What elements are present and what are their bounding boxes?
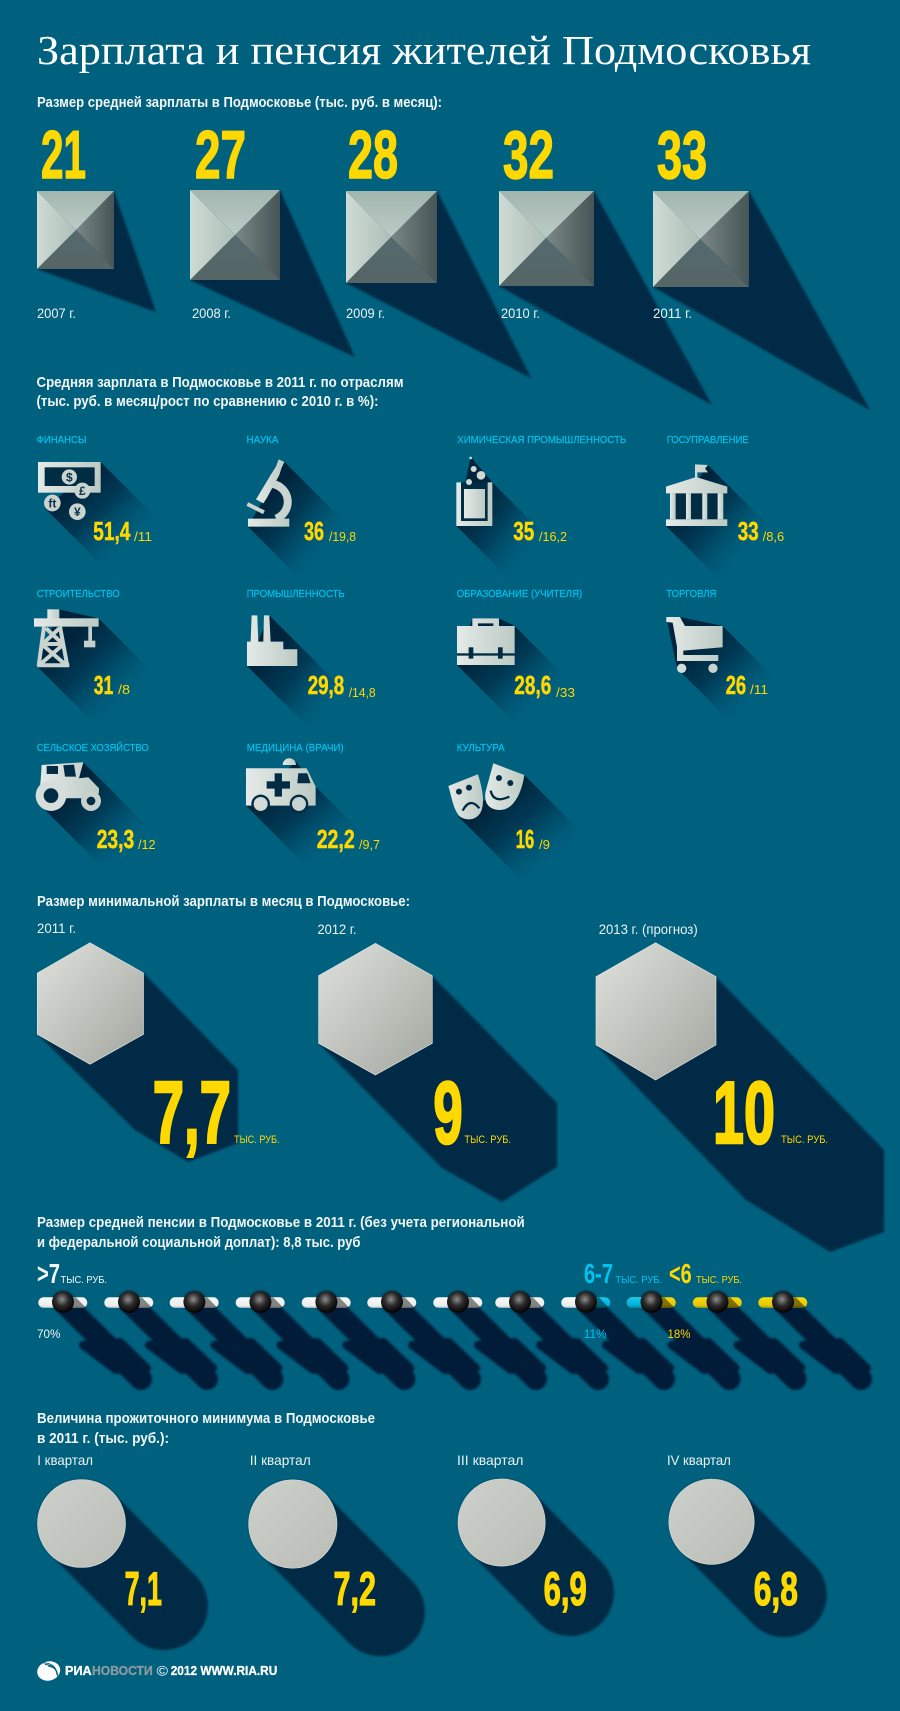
- circles: [38, 1479, 754, 1568]
- value: 35: [513, 518, 534, 546]
- value: /8,6: [763, 530, 784, 544]
- wordmark: НОВОСТИ: [92, 1664, 153, 1678]
- sector: trade: [666, 588, 786, 732]
- hexagon 2013: [596, 943, 716, 1080]
- panel: average pension: [37, 1214, 867, 1379]
- pyramid 2009: [346, 191, 437, 283]
- wordmark: ©: [156, 1662, 169, 1678]
- pension legend: ТЫС. РУБ.: [696, 1274, 742, 1286]
- label: МЕДИЦИНА (ВРАЧИ): [247, 742, 344, 754]
- icon: money: ¥: [74, 505, 81, 519]
- heading: salary by sector: [36, 374, 404, 410]
- year labels: 2012 г.: [318, 921, 356, 937]
- sector: science: [246, 434, 356, 590]
- value: 36: [304, 518, 324, 546]
- heading: salary by sector: (тыс. руб. в месяц/рост по сравнению с 2010 г. в %):: [36, 393, 378, 410]
- icon: briefcase: [457, 618, 578, 728]
- hexagon shadows: [37, 973, 884, 1252]
- sector: agriculture: [36, 741, 157, 882]
- pension legend: >7: [37, 1258, 60, 1289]
- icon: money: ft: [48, 496, 56, 510]
- value: [738, 518, 784, 546]
- balls: [52, 1291, 806, 1313]
- pension legend: [37, 1258, 742, 1289]
- quarter labels: III квартал: [457, 1452, 524, 1468]
- sector: finance: [36, 434, 164, 572]
- icon: microscope: [247, 459, 348, 590]
- panel: average salary by year: [37, 94, 870, 410]
- label: КУЛЬТУРА: [457, 742, 505, 754]
- label: ТОРГОВЛЯ: [666, 588, 716, 600]
- value: /12: [138, 838, 156, 852]
- label: ГОСУПРАВЛЕНИЕ: [667, 434, 749, 446]
- percent labels: 70%: [37, 1327, 61, 1341]
- panel: minimum wage: [37, 893, 884, 1252]
- pyramid 2008: [190, 190, 280, 280]
- value: 29,8: [308, 672, 344, 700]
- value: 22,2: [317, 826, 355, 854]
- sector: government: [666, 434, 784, 589]
- values: 6,9: [544, 1562, 587, 1615]
- value: /19,8: [329, 530, 356, 544]
- circle shadows: [82, 1522, 784, 1612]
- value: [726, 672, 768, 700]
- icon: money: [38, 462, 164, 572]
- two-tone pills, 11%: [561, 1297, 676, 1308]
- wordmark: [65, 1662, 277, 1678]
- hexagon 2011: [37, 943, 143, 1064]
- white pills, 70%: [38, 1297, 544, 1308]
- panel: subsistence minimum: [37, 1410, 798, 1615]
- value 7,7: ТЫС. РУБ.: [234, 1134, 280, 1146]
- sector: education: [457, 588, 582, 728]
- heading: subsistence minimum: Величина прожиточного минимума в Подмосковье: [37, 1410, 375, 1427]
- values: 6,8: [754, 1562, 798, 1615]
- heading: average pension: Размер средней пенсии в Подмосковье в 2011 г. (без учета региональной: [37, 1214, 525, 1231]
- value 10: 10: [713, 1063, 775, 1162]
- pyramid shadows: [37, 190, 870, 410]
- values by year: [41, 117, 707, 193]
- year labels: 2013 г. (прогноз): [599, 921, 698, 937]
- value: /9: [539, 838, 550, 852]
- icon: beaker: [456, 457, 556, 589]
- value: /11: [134, 530, 152, 544]
- icon: ambulance: [246, 758, 379, 869]
- year labels: [37, 920, 698, 937]
- label: ПРОМЫШЛЕННОСТЬ: [247, 588, 345, 600]
- pension legend: 6-7: [584, 1258, 613, 1289]
- label: ФИНАНСЫ: [36, 434, 86, 446]
- pyramid 2007: [37, 191, 114, 269]
- values: 7,2: [334, 1562, 376, 1615]
- label: НАУКА: [246, 434, 278, 446]
- value: 26: [726, 672, 746, 700]
- sector: construction: [34, 588, 162, 729]
- icon: theatre masks: [448, 763, 594, 887]
- percent labels: 18%: [668, 1327, 691, 1341]
- title: Зарплата и пенсия жителей Подмосковья: [37, 27, 811, 73]
- pin shadows: [63, 1302, 867, 1379]
- pension legend: <6: [669, 1258, 692, 1289]
- pension legend: ТЫС. РУБ.: [60, 1274, 107, 1286]
- heading: minimum wage: Размер минимальной зарплаты в месяц в Подмосковье:: [37, 893, 410, 910]
- year labels: 2007 г.: [37, 305, 76, 321]
- percent labels: [37, 1327, 691, 1341]
- quarter labels: II квартал: [250, 1452, 311, 1468]
- value: 28,6: [514, 672, 551, 700]
- yellow pills, 18%: [693, 1297, 807, 1308]
- wordmark: 2012 WWW.RIA.RU: [171, 1664, 277, 1678]
- values by year: 28: [348, 117, 398, 193]
- value: 33: [738, 518, 759, 546]
- value: [304, 518, 356, 546]
- icon: government building: [666, 464, 771, 589]
- heading: salary by sector: Средняя зарплата в Подмосковье в 2011 г. по отраслям: [36, 374, 404, 391]
- percent labels: 11%: [584, 1327, 607, 1341]
- logo: RIA Novosti: [35, 1659, 277, 1683]
- year labels: 2011 г.: [37, 920, 76, 936]
- icon: tractor: [36, 762, 157, 882]
- year labels: 2010 г.: [501, 305, 540, 321]
- value 9: 9: [433, 1063, 463, 1162]
- icon: money: $: [66, 470, 73, 484]
- values by year: 21: [41, 117, 86, 193]
- year labels: 2011 г.: [653, 305, 692, 321]
- value 7,7: 7,7: [153, 1063, 231, 1162]
- heading: subsistence minimum: в 2011 г. (тыс. руб.):: [37, 1430, 169, 1447]
- year labels: 2008 г.: [192, 305, 231, 321]
- value: /16,2: [539, 530, 567, 544]
- quarter labels: I квартал: [37, 1452, 93, 1468]
- sector: industry: [247, 588, 376, 749]
- values by year: 27: [195, 117, 246, 193]
- value: 31: [94, 672, 113, 700]
- value: [513, 518, 567, 546]
- hexagon 2012: [319, 943, 432, 1075]
- values by year: 33: [657, 117, 707, 193]
- sector: chemical industry: [456, 434, 626, 589]
- sector: culture: [448, 742, 594, 887]
- value 9: ТЫС. РУБ.: [464, 1134, 511, 1146]
- value: /8: [118, 683, 130, 697]
- icon: crane: [34, 609, 162, 729]
- values by year: 32: [503, 117, 554, 193]
- icon: globe: [35, 1659, 62, 1683]
- heading: average pension: и федеральной социальной доплат): 8,8 тыс. руб: [37, 1234, 360, 1251]
- icon: factory: [247, 615, 353, 749]
- value: /11: [750, 683, 768, 697]
- pyramid 2010: [499, 191, 594, 286]
- values: [125, 1562, 798, 1615]
- value 9: [433, 1063, 511, 1162]
- label: СЕЛЬСКОЕ ХОЗЯЙСТВО: [37, 741, 149, 754]
- label: ОБРАЗОВАНИЕ (УЧИТЕЛЯ): [457, 588, 582, 600]
- quarter labels: IV квартал: [667, 1452, 731, 1468]
- pyramid 2011: [653, 191, 749, 287]
- sector: medicine: [246, 742, 380, 869]
- value 10: ТЫС. РУБ.: [781, 1134, 828, 1146]
- icon: money: £: [79, 484, 86, 498]
- value: /14,8: [349, 686, 376, 700]
- label: СТРОИТЕЛЬСТВО: [37, 588, 120, 600]
- heading: average pension: [37, 1214, 525, 1251]
- value: /9,7: [359, 838, 380, 852]
- value: 23,3: [97, 826, 134, 854]
- label: ХИМИЧЕСКАЯ ПРОМЫШЛЕННОСТЬ: [457, 434, 626, 446]
- panel: salary by sector: [34, 374, 786, 887]
- quarter labels: [37, 1452, 731, 1468]
- wordmark: РИА: [65, 1664, 92, 1678]
- year labels: [37, 305, 692, 321]
- pension legend: ТЫС. РУБ.: [615, 1274, 662, 1286]
- value: /33: [556, 686, 575, 700]
- icon: shopping cart: [666, 617, 786, 732]
- value: 51,4: [93, 518, 131, 546]
- heading: average salary: Размер средней зарплаты в Подмосковье (тыс. руб. в месяц):: [37, 94, 442, 111]
- value: 16: [516, 826, 534, 854]
- heading: subsistence minimum: [37, 1410, 375, 1447]
- values: 7,1: [125, 1562, 162, 1615]
- year labels: 2009 г.: [346, 305, 385, 321]
